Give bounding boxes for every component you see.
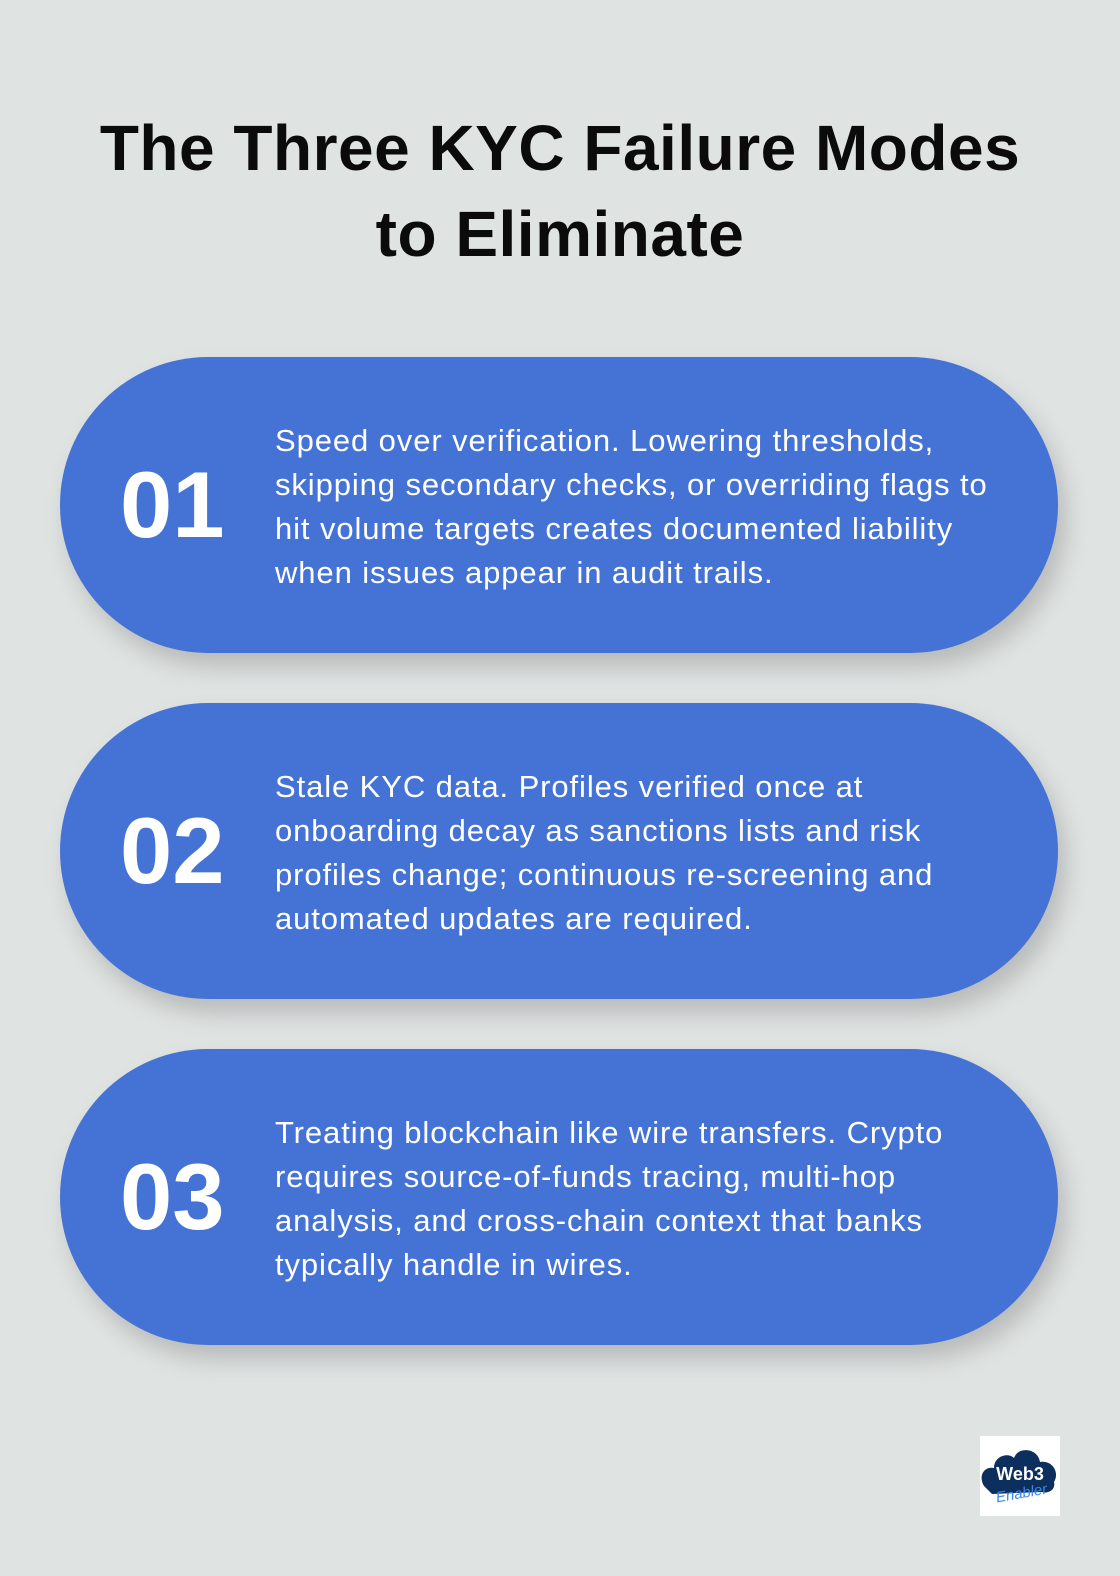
text 2: Stale KYC data. Profiles verified once at bbox=[275, 769, 863, 804]
text 3: Treating blockchain like wire transfers. Crypto bbox=[275, 1115, 943, 1150]
text 2: profiles change; continuous re-screening and bbox=[275, 857, 933, 892]
text 1 bbox=[275, 423, 988, 590]
title: to Eliminate bbox=[376, 198, 744, 270]
card 3 bbox=[60, 1049, 1058, 1345]
title: The Three KYC Failure Modes bbox=[100, 112, 1020, 184]
number 03: 03 bbox=[120, 1144, 225, 1249]
title bbox=[100, 112, 1020, 270]
text 1: Speed over verification. Lowering thresholds, bbox=[275, 423, 934, 458]
number 01: 01 bbox=[120, 452, 225, 557]
text 1: skipping secondary checks, or overriding flags to bbox=[275, 467, 988, 502]
card 2 bbox=[60, 703, 1058, 999]
logo bbox=[980, 1436, 1060, 1516]
card 1 bbox=[60, 357, 1058, 653]
text 1: hit volume targets creates documented liability bbox=[275, 511, 953, 546]
text 3: typically handle in wires. bbox=[275, 1247, 633, 1282]
text 2: onboarding decay as sanctions lists and risk bbox=[275, 813, 921, 848]
text 2: automated updates are required. bbox=[275, 901, 753, 936]
logo: Enabler bbox=[995, 1481, 1049, 1506]
text 3: analysis, and cross-chain context that banks bbox=[275, 1203, 923, 1238]
number 02: 02 bbox=[120, 798, 225, 903]
text 1: when issues appear in audit trails. bbox=[275, 555, 773, 590]
text 2 bbox=[275, 769, 933, 936]
logo: Web3 bbox=[996, 1464, 1044, 1484]
text 3 bbox=[275, 1115, 943, 1282]
text 3: requires source-of-funds tracing, multi-hop bbox=[275, 1159, 896, 1194]
